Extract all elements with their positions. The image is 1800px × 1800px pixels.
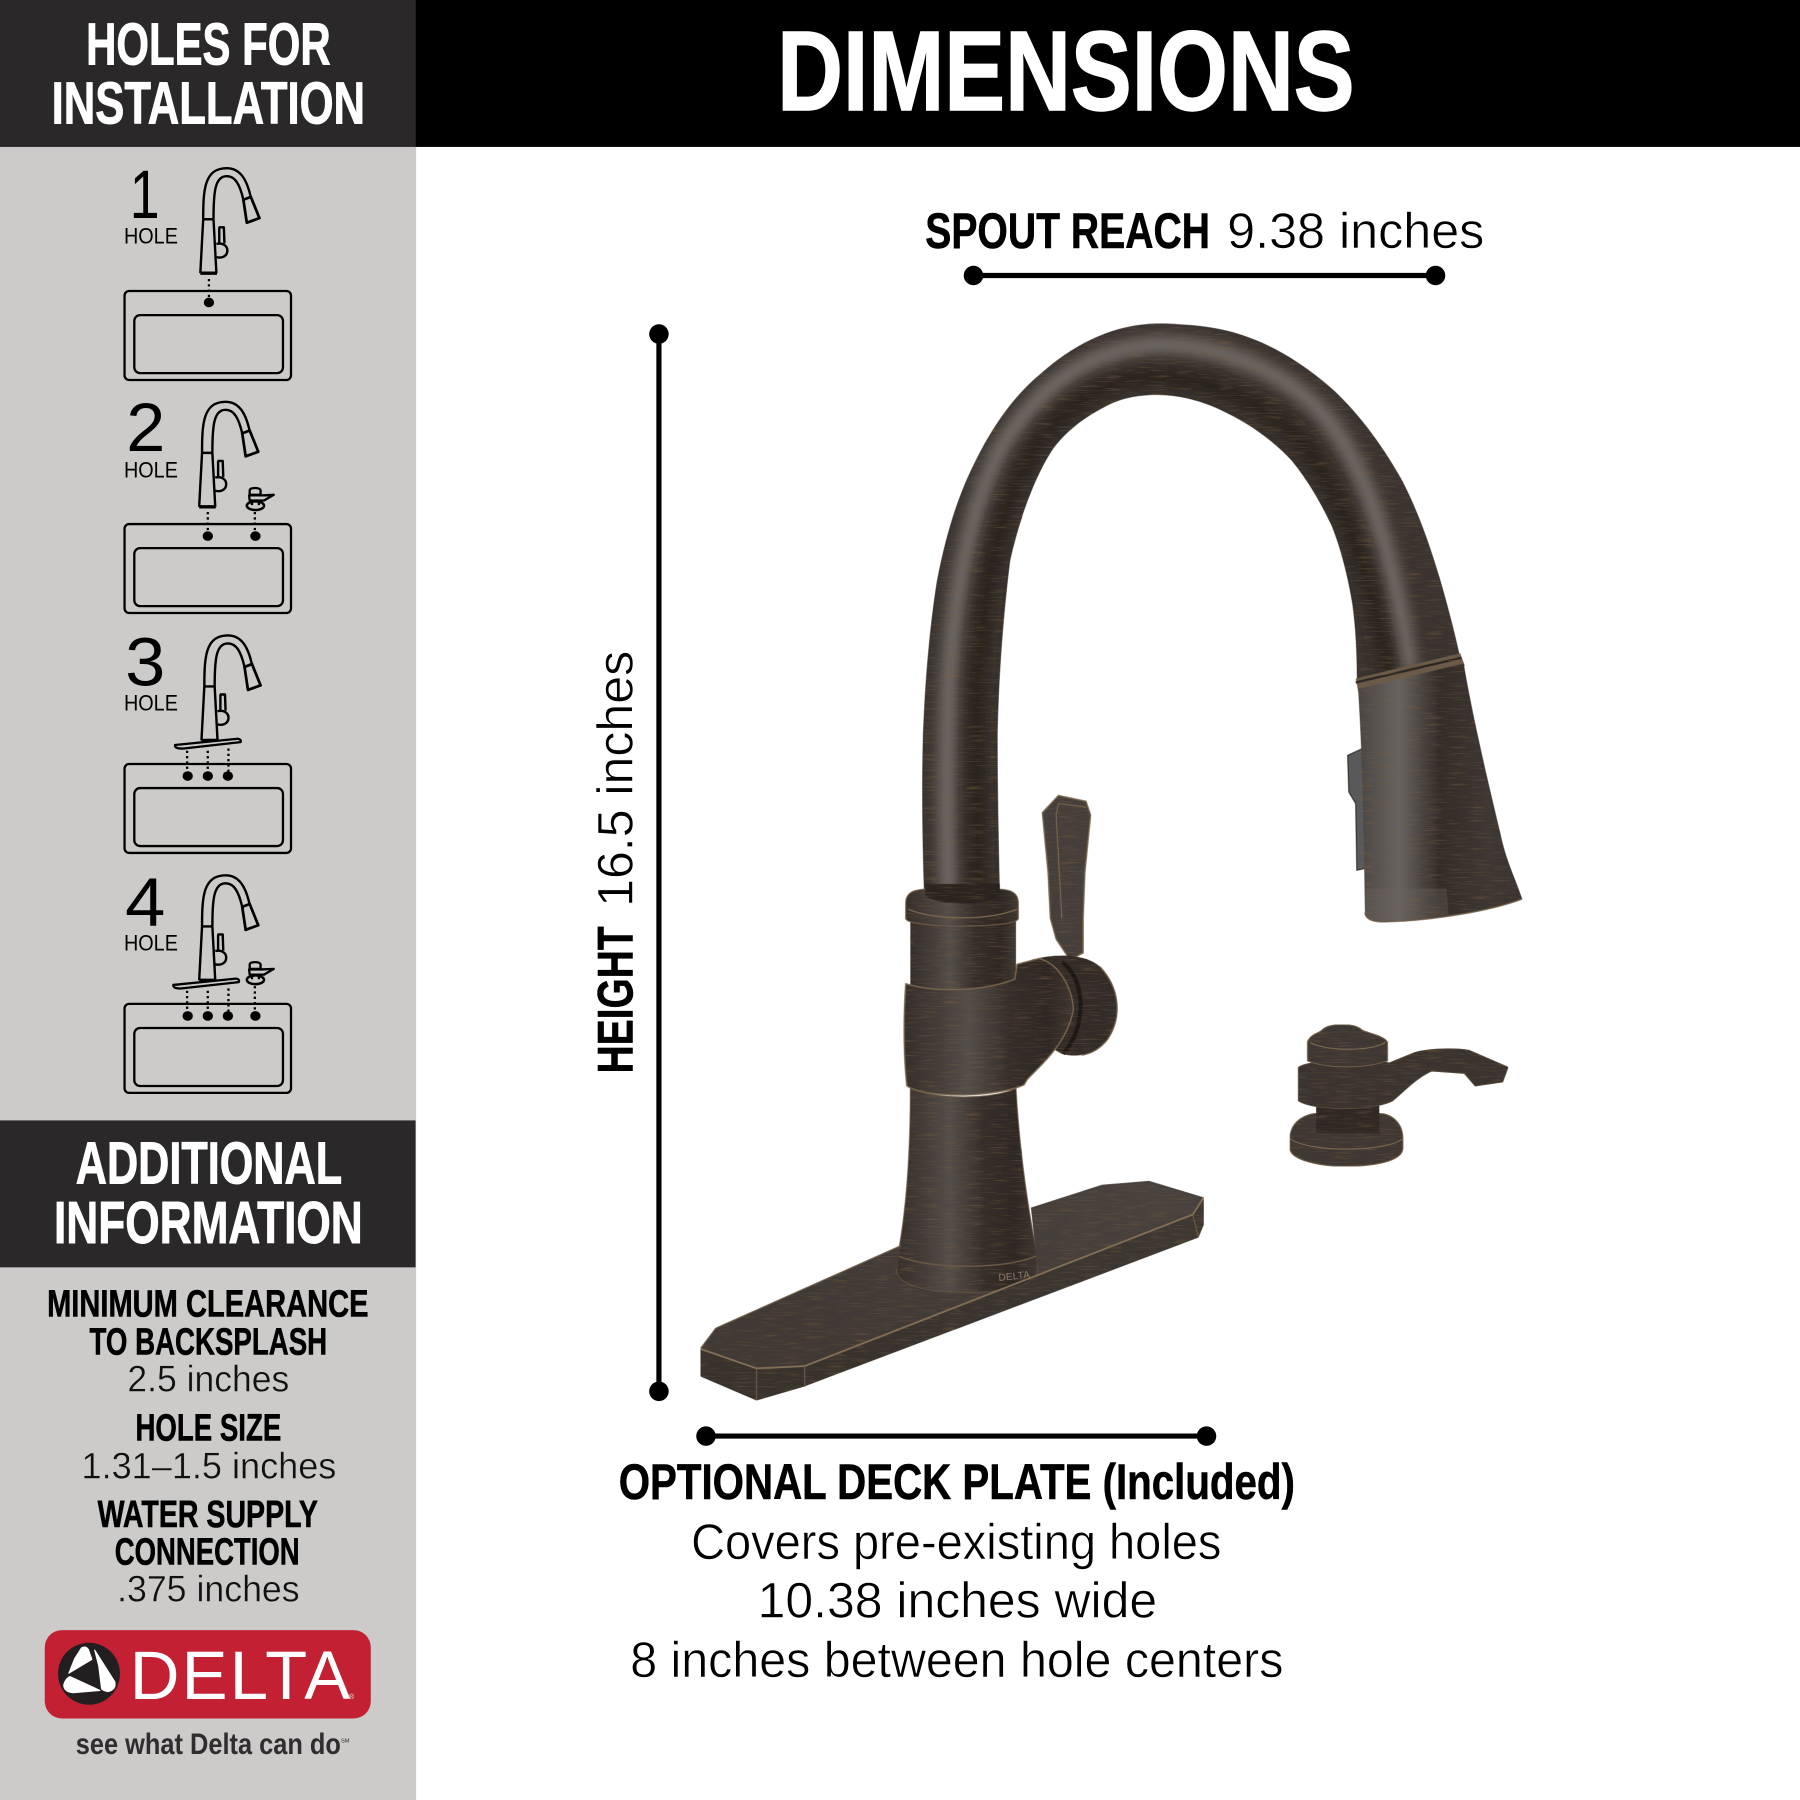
text: hole size (82, 1408, 336, 1487)
dimension: height: HEIGHT (587, 926, 644, 1073)
heading: additional information: ADDITIONAL (76, 1130, 342, 1197)
text: tagline: see what Delta can do (76, 1729, 341, 1761)
icon: 3 hole installation: HOLE (124, 691, 178, 716)
dimension: height (587, 324, 669, 1401)
heading: additional information (0, 1120, 416, 1267)
dimension: deck plate: OPTIONAL DECK PLATE (Included) (619, 1453, 1295, 1510)
dimension: spout reach (925, 202, 1484, 285)
faucet handle (1025, 796, 1117, 1056)
faucet neck (922, 324, 1460, 895)
icon: 2 hole installation: 2 (126, 389, 165, 466)
text: water supply connection: CONNECTION (115, 1532, 300, 1574)
icon: 1 hole installation: HOLE (124, 223, 178, 248)
icon: 2 hole installation: HOLE (124, 458, 178, 483)
title: dimensions (416, 0, 1800, 147)
text: tagline: SM (341, 1739, 350, 1745)
text: water supply connection: WATER SUPPLY (98, 1494, 318, 1536)
icon: 3 hole installation (124, 623, 291, 853)
text: minimum clearance: TO BACKSPLASH (90, 1322, 327, 1364)
photo: deck plate (700, 1181, 1204, 1401)
text: hole size: 1.31–1.5 inches (82, 1446, 336, 1487)
text: water supply connection: .375 inches (117, 1568, 300, 1609)
dimension: height: 16.5 inches (587, 651, 644, 907)
dimension: deck plate: 10.38 inches wide (758, 1571, 1157, 1628)
icon: 3 hole installation: 3 (125, 623, 165, 700)
heading: holes for installation: INSTALLATION (52, 69, 365, 136)
dimension: deck plate: Covers pre-existing holes (691, 1513, 1221, 1570)
photo: faucet (897, 324, 1522, 1293)
icon: 4 hole installation: HOLE (124, 931, 178, 956)
text: water supply connection (98, 1494, 318, 1609)
dimension: spout reach: SPOUT REACH (925, 202, 1210, 259)
icon: 1 hole installation (124, 156, 291, 380)
icon: 4 hole installation (124, 863, 291, 1093)
panel: sidebar (0, 0, 416, 1800)
icon: 2 hole installation (124, 389, 291, 613)
title: dimensions: DIMENSIONS (777, 8, 1355, 135)
text: minimum clearance (47, 1284, 368, 1399)
text: minimum clearance: MINIMUM CLEARANCE (47, 1284, 368, 1326)
faucet column (897, 884, 1073, 1293)
text: minimum clearance: 2.5 inches (127, 1358, 289, 1399)
dimension: deck plate (619, 1426, 1295, 1688)
faucet spray head (1348, 653, 1522, 922)
heading: additional information: INFORMATION (54, 1189, 363, 1256)
logo: delta (45, 1630, 371, 1718)
dimension: deck plate: 8 inches between hole centers (630, 1631, 1283, 1688)
heading: holes for installation (0, 0, 416, 147)
dimension: spout reach: 9.38 inches (1227, 202, 1484, 259)
photo: soap dispenser (1290, 1025, 1508, 1166)
heading: holes for installation: HOLES FOR (86, 10, 331, 77)
icon: 1 hole installation: 1 (130, 156, 160, 233)
faucet column: DELTA (998, 1270, 1031, 1284)
icon: 4 hole installation: 4 (125, 863, 165, 940)
logo: delta: ® (349, 1693, 354, 1701)
text: hole size: HOLE SIZE (135, 1408, 281, 1450)
logo: delta: DELTA (130, 1637, 350, 1714)
